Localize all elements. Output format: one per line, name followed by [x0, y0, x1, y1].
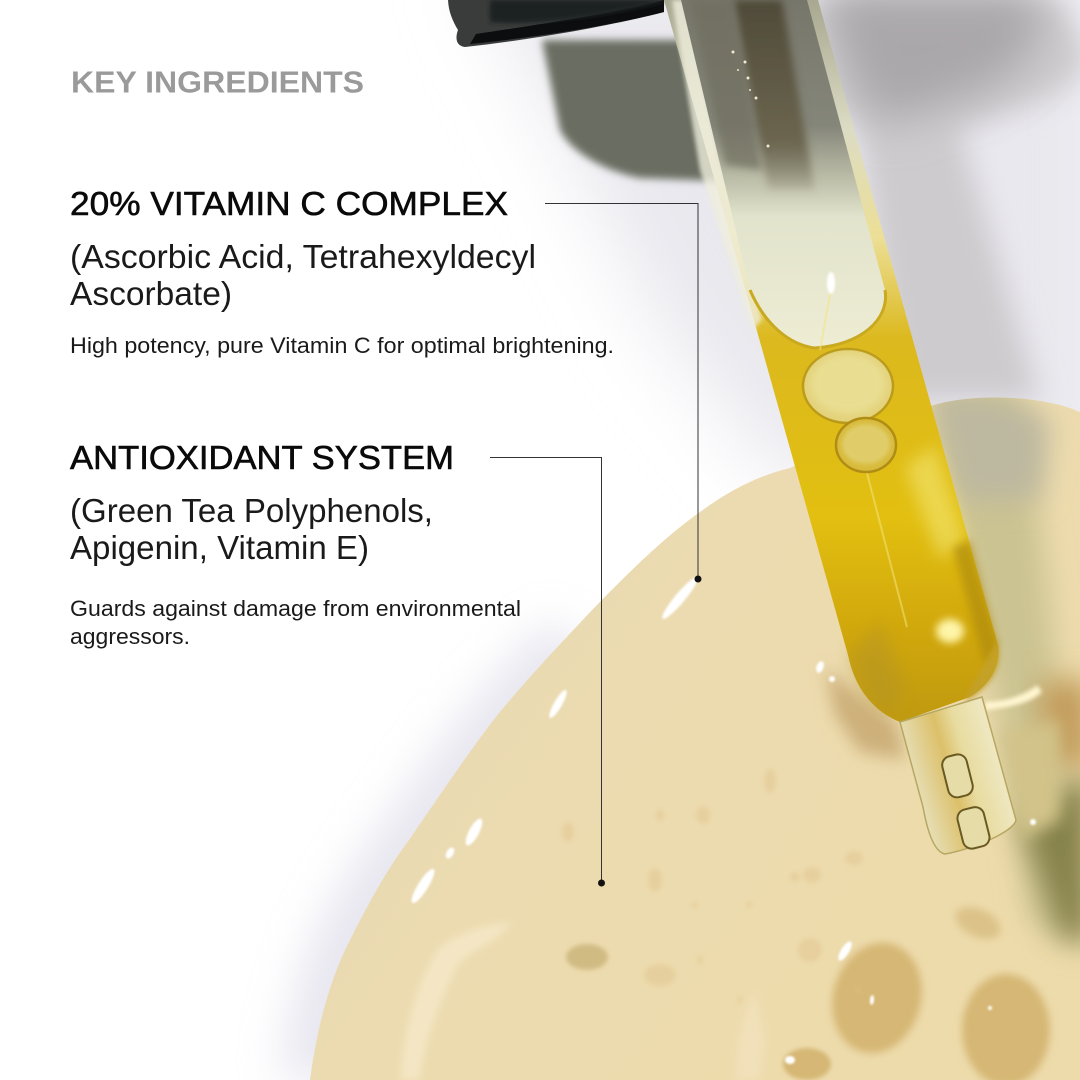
dropper cap: [448, 0, 664, 47]
glitter: [732, 50, 770, 148]
speckles: [562, 769, 863, 1003]
dark core band: [734, 0, 815, 190]
inner air tube: [681, 0, 886, 348]
dropper tip: [900, 697, 1016, 854]
blob shading: [400, 390, 1080, 1080]
ingredient block: vitamin C: (Ascorbic Acid, Tetrahexyldecyl: [70, 238, 536, 275]
ingredient block: antioxidant system: Apigenin, Vitamin E): [70, 529, 369, 566]
callout line: vitamin C: [545, 204, 702, 582]
product swatch: [280, 390, 1080, 1080]
ingredient block: antioxidant system: aggressors.: [70, 624, 190, 649]
yellow side highlight: [905, 445, 965, 560]
ingredient block: antioxidant system: ANTIOXIDANT SYSTEM: [70, 439, 454, 476]
ingredient block: antioxidant system: Guards against damage from environmental: [70, 596, 521, 621]
ingredient block: antioxidant system: (Green Tea Polyphenols,: [70, 492, 433, 529]
ingredient block: antioxidant system: [70, 439, 521, 649]
dropper pipette: [664, 0, 1000, 722]
ingredient block: vitamin C: Ascorbate): [70, 275, 232, 312]
gloss highlights: [408, 574, 1036, 1064]
pale streak: [400, 922, 512, 1080]
ingredient block: vitamin C: High potency, pure Vitamin C for optimal brightening.: [70, 333, 614, 358]
bubbles: [803, 349, 896, 472]
ingredient block: vitamin C: [70, 185, 614, 358]
callout line: antioxidant system: [490, 458, 605, 886]
heading: key ingredients: KEY INGREDIENTS: [71, 64, 364, 100]
ingredient block: vitamin C: 20% VITAMIN C COMPLEX: [70, 185, 508, 222]
cast shadow of dropper: [542, 0, 1080, 400]
left glass highlight: [672, 0, 762, 330]
